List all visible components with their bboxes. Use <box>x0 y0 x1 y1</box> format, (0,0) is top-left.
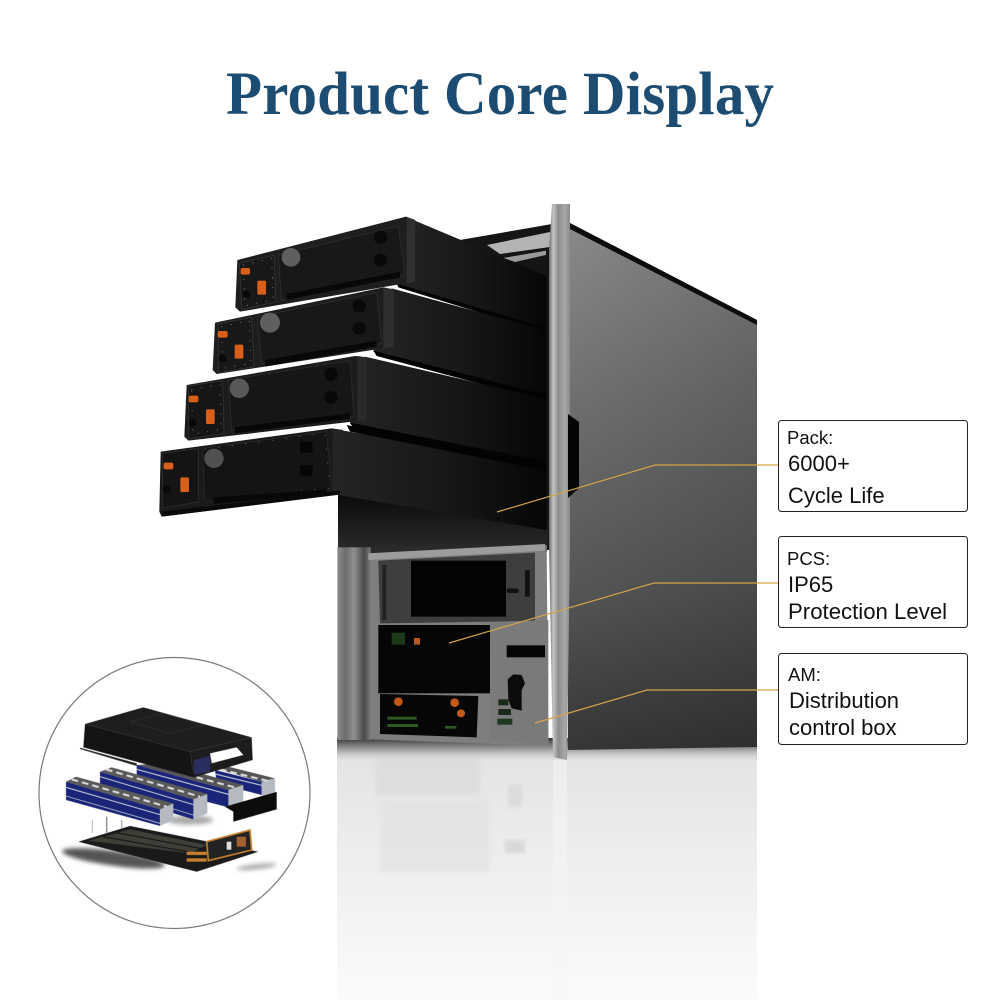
callout: pack: 6000+ <box>788 451 850 476</box>
module 2 <box>213 287 547 402</box>
callout: pack: Pack: <box>787 427 833 448</box>
callout: AM: control box <box>789 715 897 740</box>
battery control panel <box>378 625 490 693</box>
exploded battery pack inset <box>39 658 310 928</box>
leader: AM <box>535 690 778 723</box>
leader: PCS <box>449 583 778 643</box>
floor reflection <box>337 738 757 1000</box>
PCS panel <box>378 553 535 623</box>
cavity under modules <box>338 490 549 560</box>
top rail <box>368 544 545 560</box>
base tray <box>78 817 258 872</box>
callout: AM: Distribution <box>789 688 899 713</box>
callout: pack <box>778 420 968 512</box>
title: Product Core Display <box>226 60 774 128</box>
module 3 <box>184 356 547 468</box>
callout: pack: Cycle Life <box>788 483 885 508</box>
callout: PCS: PCS: <box>787 548 830 569</box>
module 1 <box>235 217 547 333</box>
callout: AM: AM: <box>788 664 821 685</box>
callout: PCS: Protection Level <box>788 599 947 624</box>
cell row 2 <box>100 767 207 819</box>
inset circle <box>39 658 310 928</box>
callout: PCS: IP65 <box>788 572 833 597</box>
cell row 3 <box>137 763 243 807</box>
lower equipment bay <box>337 544 548 746</box>
cell row 1 <box>66 777 173 826</box>
pulled out battery modules <box>159 217 547 530</box>
aluminium corner post <box>337 547 371 740</box>
module 4 <box>159 425 547 530</box>
callout: AM <box>778 654 968 744</box>
front end plate <box>225 792 277 822</box>
floor shadows <box>61 815 277 873</box>
top cover <box>80 707 253 777</box>
lower power panel <box>380 694 478 737</box>
pack exploded parts <box>61 707 277 873</box>
cabinet side panel <box>568 222 757 750</box>
leader lines <box>449 465 778 723</box>
bay backing <box>370 545 548 746</box>
door frame post <box>546 204 570 760</box>
cabinet rear top edge <box>460 224 552 290</box>
callout: PCS <box>778 536 968 628</box>
rear cell row <box>215 765 275 796</box>
door handle slot <box>568 414 579 498</box>
leader: pack <box>497 465 778 512</box>
AM distribution panel <box>490 620 548 744</box>
